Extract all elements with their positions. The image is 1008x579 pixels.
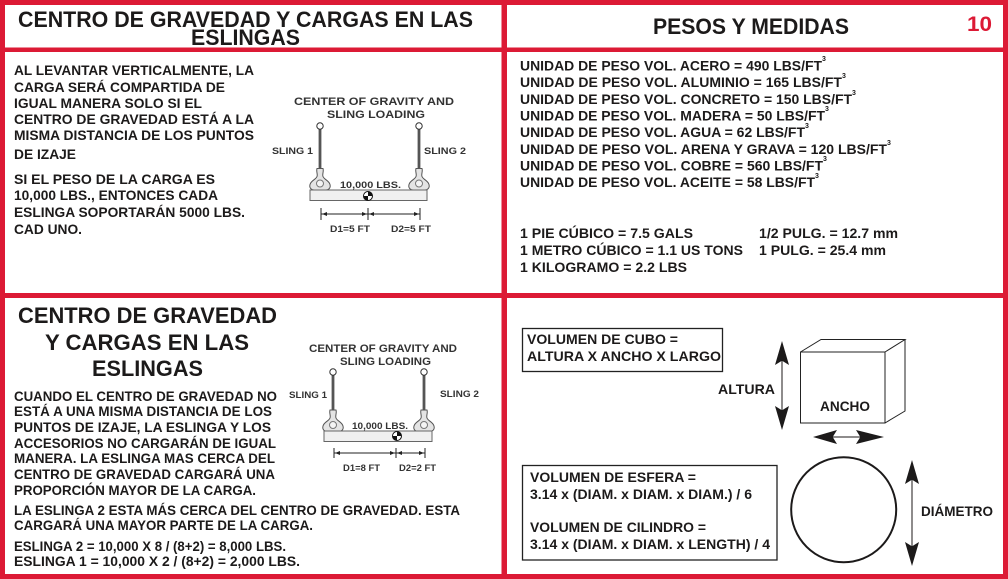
text block: unequal load explanation (14, 389, 460, 569)
diagram: sling loading 8 ft / 2 ft: 10,000 LBS. (352, 421, 408, 431)
list: unit weights: UNIDAD DE PESO VOL. AGUA = 62 LBS/FT (520, 124, 805, 140)
icon: cube: ANCHO (820, 399, 870, 414)
list: unit weights: UNIDAD DE PESO VOL. MADERA = 50 LBS/FT (520, 108, 825, 124)
heading: centro de gravedad: ESLINGAS (191, 25, 300, 50)
text block: equal load explanation: AL LEVANTAR VERTICALMENTE, LA (14, 63, 254, 78)
diagram: sling loading 5 ft / 5 ft: CENTER OF GRAVITY AND (294, 96, 454, 108)
text block: equal load explanation: SI EL PESO DE LA CARGA ES (14, 172, 215, 187)
list: unit weights: 3 (805, 123, 809, 130)
diagram: sling loading 5 ft / 5 ft: SLING 2 (424, 146, 466, 156)
panel: title right (507, 5, 1003, 48)
text block: unequal load explanation: ESLINGA 1 = 10,000 X 2 / (8+2) = 2,000 LBS. (14, 554, 300, 569)
callout: sphere and cylinder volume: 3.14 x (DIAM. x DIAM. x LENGTH) / 4 (530, 537, 770, 552)
callout: sphere and cylinder volume: VOLUMEN DE ESFERA = (530, 470, 696, 485)
diagram: sling loading 5 ft / 5 ft: D1=5 FT (330, 224, 371, 234)
panel: title left (5, 5, 502, 50)
text block: equal load explanation (14, 63, 254, 237)
diagram: sling loading 8 ft / 2 ft: D2=2 FT (399, 463, 437, 473)
heading: centro de gravedad y cargas: CENTRO DE GRAVEDAD (18, 303, 277, 328)
text block: unequal load explanation: MANERA. LA ESLINGA MAS CERCA DEL (14, 451, 275, 466)
icon: cube (800, 340, 905, 423)
arrow: height (775, 341, 789, 430)
list: unit weights: 3 (815, 173, 819, 180)
list: unit weights: UNIDAD DE PESO VOL. ARENA Y GRAVA = 120 LBS/FT (520, 141, 887, 157)
text block: unequal load explanation: ACCESORIOS NO CARGARÁN DE IGUAL (14, 436, 276, 451)
callout: sphere and cylinder volume: 3.14 x (DIAM. x DIAM. x DIAM.) / 6 (530, 487, 752, 502)
page number: 10 (967, 12, 992, 36)
text block: unequal load explanation: LA ESLINGA 2 ESTA MÁS CERCA DEL CENTRO DE GRAVEDAD. ESTA (14, 503, 460, 518)
text block: unequal load explanation: PUNTOS DE IZAJE, LA ESLINGA Y LOS (14, 420, 271, 435)
list: unit weights: 3 (842, 73, 846, 80)
label: diametro: DIÁMETRO (921, 504, 993, 519)
arrow: width (813, 430, 884, 444)
list: unit weights: 3 (823, 156, 827, 163)
text block: unequal load explanation: CARGARÁ UNA MAYOR PARTE DE LA CARGA. (14, 518, 313, 533)
text block: equal load explanation: CENTRO DE GRAVEDAD ESTÁ A LA (14, 112, 254, 127)
list: unit weights: UNIDAD DE PESO VOL. CONCRETO = 150 LBS/FT (520, 91, 852, 107)
list: unit weights: 3 (887, 140, 891, 147)
text block: unequal load explanation: CENTRO DE GRAVEDAD CARGARÁ UNA (14, 467, 275, 482)
callout: sphere and cylinder volume (522, 466, 777, 560)
heading: pesos y medidas: PESOS Y MEDIDAS (653, 14, 849, 39)
panel: weights and measures (507, 52, 1003, 293)
list: conversions: 1 KILOGRAMO = 2.2 LBS (520, 259, 687, 275)
list: unit weights: 3 (822, 56, 826, 63)
panel: center of gravity unequal (5, 298, 502, 574)
diagram: sling loading 5 ft / 5 ft: 10,000 LBS. (340, 180, 401, 190)
text block: equal load explanation: CAD UNO. (14, 222, 82, 237)
heading: centro de gravedad y cargas: ESLINGAS (92, 356, 203, 381)
list: conversions (520, 224, 898, 275)
text block: unequal load explanation: CUANDO EL CENTRO DE GRAVEDAD NO (14, 389, 277, 404)
text block: unequal load explanation: ESLINGA 2 = 10,000 X 8 / (8+2) = 8,000 LBS. (14, 539, 286, 554)
text block: equal load explanation: DE IZAJE (14, 147, 76, 162)
list: unit weights: 3 (852, 90, 856, 97)
icon: circle (791, 457, 896, 562)
text block: equal load explanation: CARGA SERÁ COMPARTIDA DE (14, 80, 225, 95)
diagram: sling loading 8 ft / 2 ft: CENTER OF GRAVITY AND (309, 343, 457, 355)
list: unit weights: UNIDAD DE PESO VOL. ACERO = 490 LBS/FT (520, 58, 822, 74)
list: unit weights: UNIDAD DE PESO VOL. COBRE = 560 LBS/FT (520, 158, 823, 174)
panel: center of gravity equal (5, 52, 502, 293)
list: conversions: 1 PIE CÚBICO = 7.5 GALS (520, 224, 693, 241)
diagram: sling loading 5 ft / 5 ft: D2=5 FT (391, 224, 432, 234)
text block: equal load explanation: ESLINGA SOPORTARÁN 5000 LBS. (14, 205, 245, 220)
diagram: sling loading 8 ft / 2 ft: D1=8 FT (343, 463, 381, 473)
list: unit weights (520, 56, 891, 190)
list: conversions: 1/2 PULG. = 12.7 mm (759, 225, 898, 241)
list: unit weights: UNIDAD DE PESO VOL. ALUMINIO = 165 LBS/FT (520, 74, 842, 90)
heading: centro de gravedad: CENTRO DE GRAVEDAD Y CARGAS EN LAS (18, 7, 473, 32)
heading: centro de gravedad (18, 7, 473, 50)
diagram: sling loading 5 ft / 5 ft (272, 96, 466, 234)
diagram: sling loading 8 ft / 2 ft: SLING 2 (440, 389, 479, 399)
list: unit weights: UNIDAD DE PESO VOL. ACEITE = 58 LBS/FT (520, 174, 815, 190)
text block: equal load explanation: 10,000 LBS., ENTONCES CADA (14, 188, 218, 203)
diagram: sling loading 8 ft / 2 ft (289, 343, 479, 473)
text block: equal load explanation: MISMA DISTANCIA DE LOS PUNTOS (14, 128, 254, 143)
list: conversions: 1 METRO CÚBICO = 1.1 US TONS (520, 241, 743, 258)
diagram: sling loading 8 ft / 2 ft: SLING LOADING (340, 356, 431, 368)
callout: cube volume (522, 328, 722, 372)
callout: cube volume: ALTURA X ANCHO X LARGO (527, 349, 721, 364)
list: conversions: 1 PULG. = 25.4 mm (759, 242, 886, 258)
diagram: sling loading 5 ft / 5 ft: SLING LOADING (327, 109, 425, 121)
diagram: sling loading 8 ft / 2 ft: SLING 1 (289, 390, 327, 400)
text block: unequal load explanation: ESTÁ A UNA MISMA DISTANCIA DE LOS (14, 404, 272, 419)
arrow: diameter (905, 460, 919, 566)
callout: cube volume: VOLUMEN DE CUBO = (527, 332, 678, 347)
text block: unequal load explanation: PROPORCIÓN MAYOR DE LA CARGA. (14, 483, 256, 498)
heading: centro de gravedad y cargas: Y CARGAS EN LAS (45, 330, 249, 355)
diagram: sling loading 5 ft / 5 ft: SLING 1 (272, 146, 313, 156)
callout: sphere and cylinder volume: VOLUMEN DE CILINDRO = (530, 520, 706, 535)
text block: equal load explanation: IGUAL MANERA SOLO SI EL (14, 96, 202, 111)
list: unit weights: 3 (825, 106, 829, 113)
heading: centro de gravedad y cargas (18, 303, 277, 381)
label: altura: ALTURA (718, 382, 775, 397)
panel: volumes (507, 298, 1003, 574)
